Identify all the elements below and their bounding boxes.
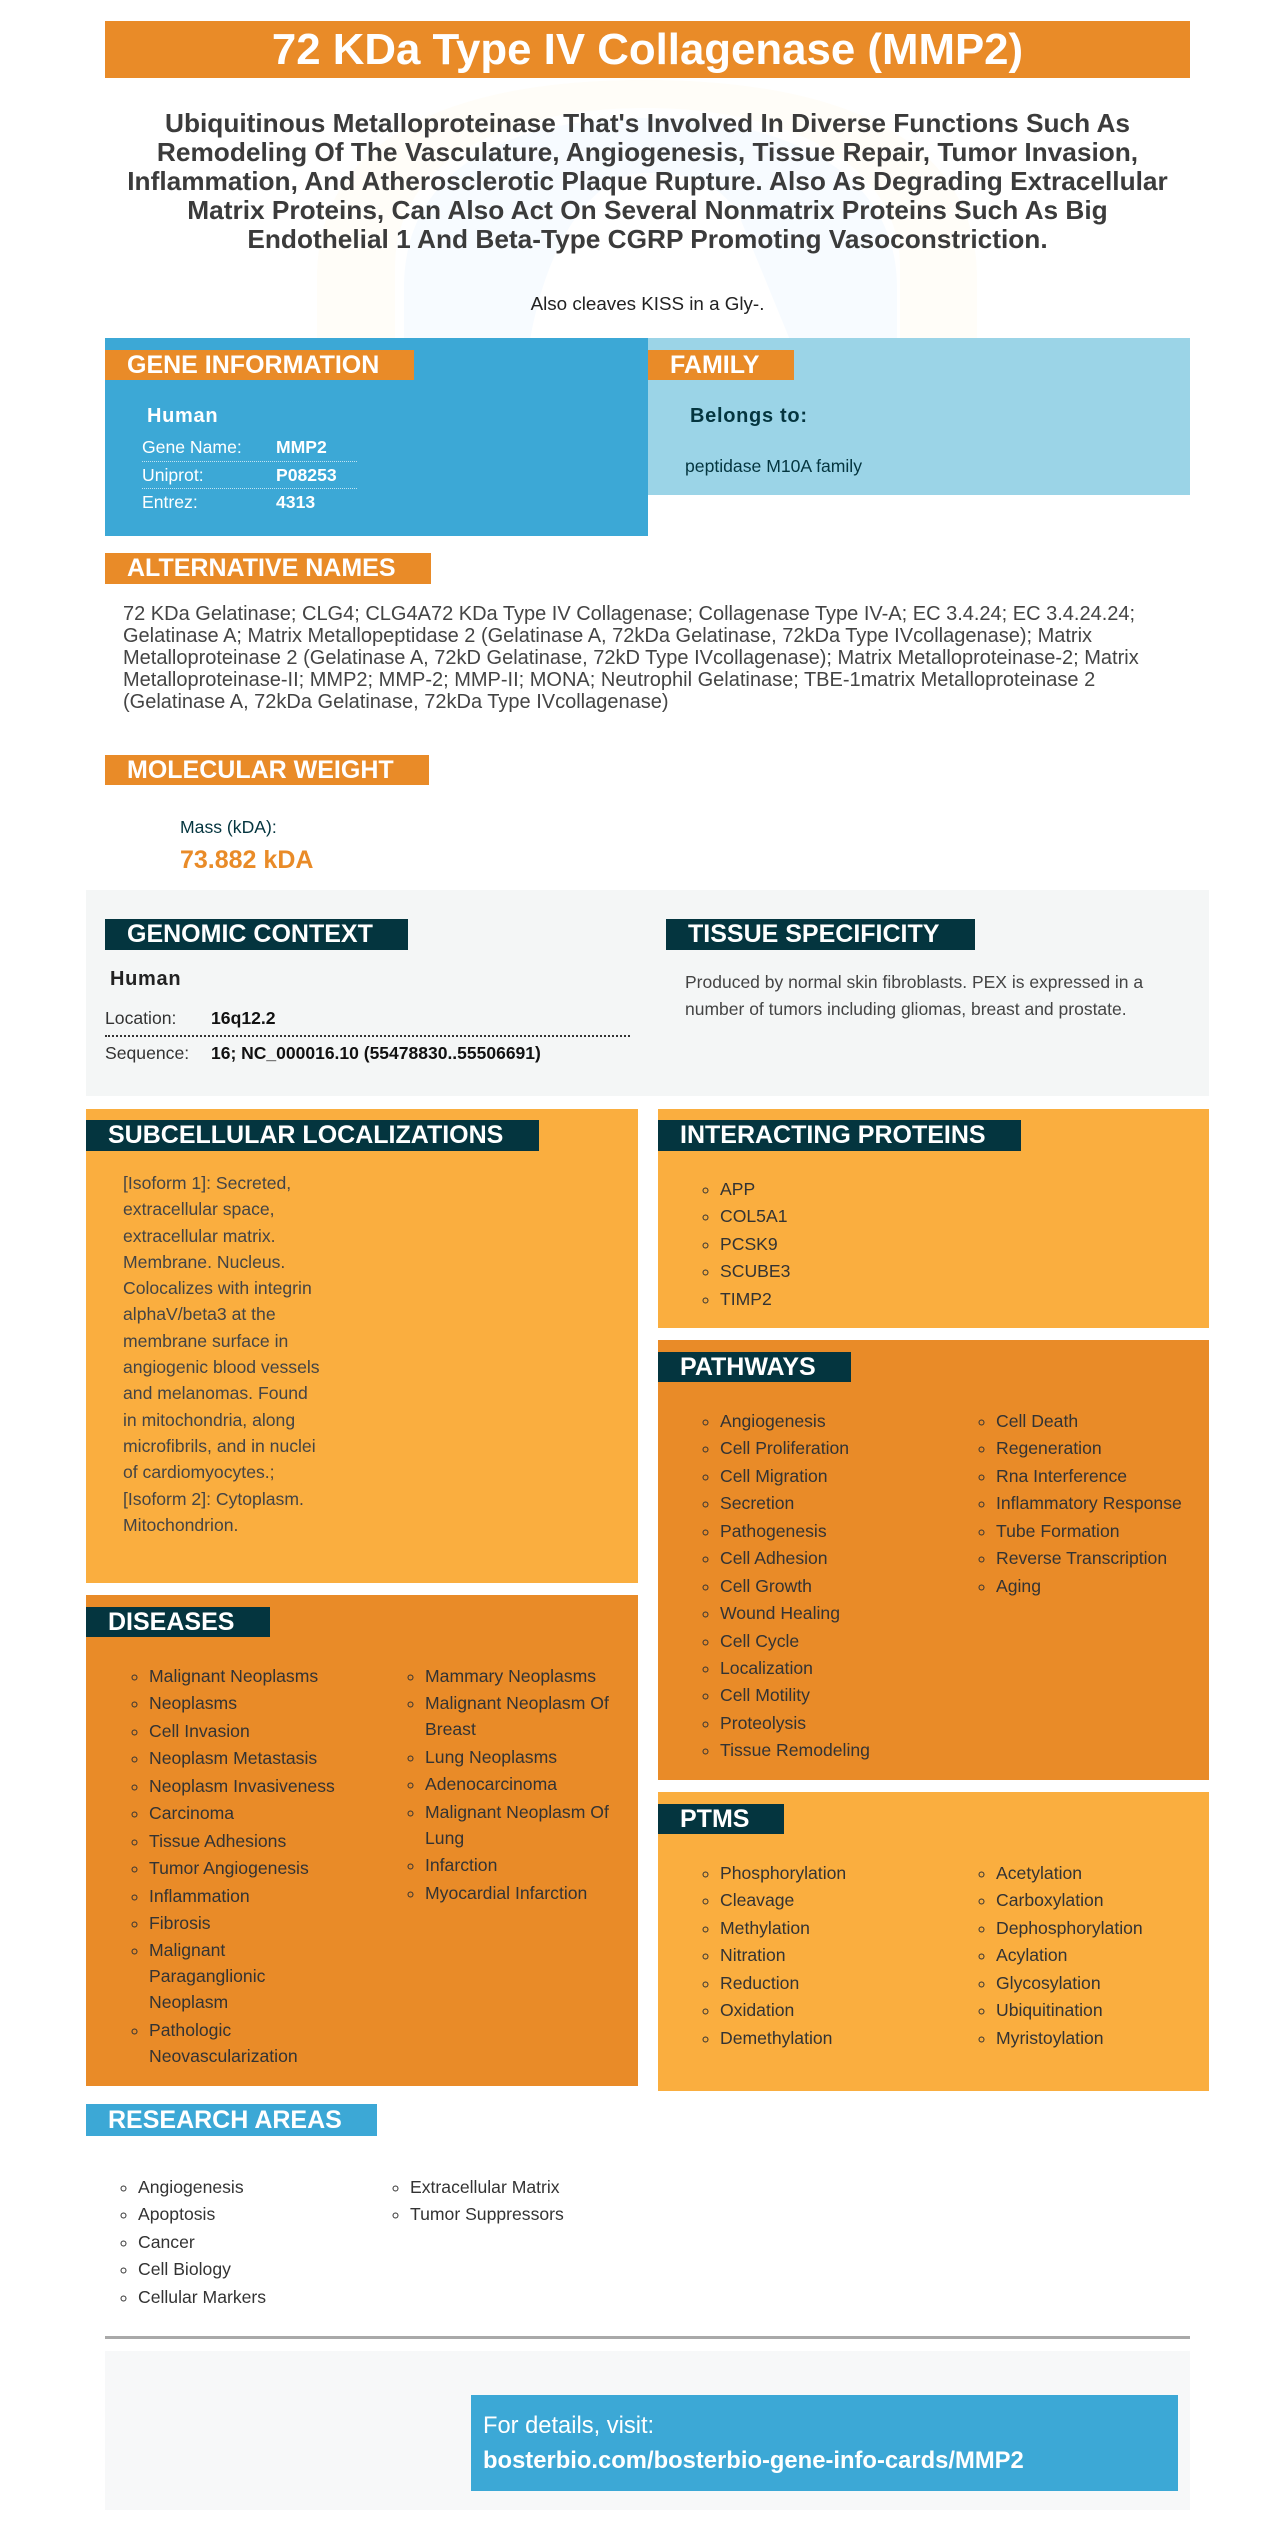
pathway list column 2: Tube Formation bbox=[996, 1521, 1120, 1541]
disease list column 1: Malignant bbox=[149, 1940, 225, 1960]
subcellular text: microfibrils, and in nuclei bbox=[123, 1436, 316, 1456]
subcellular text: extracellular space, bbox=[123, 1199, 275, 1219]
disease list column 1: Neovascularization bbox=[149, 2046, 298, 2066]
ptm list column 2: Glycosylation bbox=[996, 1973, 1101, 1993]
research list column 1: Cell Biology bbox=[138, 2259, 231, 2279]
pathway list column 1 bbox=[702, 1411, 870, 1760]
pathway list column 1: Localization bbox=[720, 1658, 813, 1678]
subcellular text: [Isoform 1]: Secreted, bbox=[123, 1173, 291, 1193]
protein list: COL5A1 bbox=[720, 1206, 787, 1226]
ptm list column 1 bbox=[702, 1863, 846, 2048]
pathway list column 2: Reverse Transcription bbox=[996, 1548, 1167, 1568]
disease list column 1: Tissue Adhesions bbox=[149, 1831, 286, 1851]
panel: footer bbox=[105, 2351, 1190, 2510]
heading: genomic context: GENOMIC CONTEXT bbox=[127, 920, 373, 948]
description bbox=[127, 108, 1168, 254]
pathway list column 1: Cell Cycle bbox=[720, 1630, 799, 1650]
pathway list column 2: Aging bbox=[996, 1576, 1041, 1596]
research list column 1: Apoptosis bbox=[138, 2204, 215, 2224]
pathway list column 1: Cell Proliferation bbox=[720, 1438, 849, 1458]
heading: gene information: GENE INFORMATION bbox=[127, 351, 379, 379]
heading: tissue specificity: TISSUE SPECIFICITY bbox=[688, 920, 939, 948]
ptm list column 2: Ubiquitination bbox=[996, 2000, 1103, 2020]
location row: 16q12.2 bbox=[211, 1008, 276, 1028]
protein list: SCUBE3 bbox=[720, 1261, 790, 1281]
belongs to: Belongs to: bbox=[690, 405, 808, 427]
pathway list column 2 bbox=[978, 1411, 1182, 1596]
heading: pathways bbox=[658, 1352, 851, 1382]
heading: interacting proteins: INTERACTING PROTEINS bbox=[680, 1121, 986, 1149]
tissue specificity text: number of tumors including gliomas, breast and prostate. bbox=[685, 998, 1127, 1018]
heading: family: FAMILY bbox=[670, 351, 759, 379]
research list column 2: Tumor Suppressors bbox=[410, 2204, 564, 2224]
uniprot row: Uniprot: bbox=[142, 465, 204, 485]
subcellular text: [Isoform 2]: Cytoplasm. bbox=[123, 1489, 304, 1509]
panel: diseases bbox=[86, 1595, 638, 2086]
disease list column 1: Inflammation bbox=[149, 1886, 250, 1906]
heading: diseases bbox=[86, 1607, 270, 1637]
pathway list column 2: Regeneration bbox=[996, 1438, 1102, 1458]
mass label: Mass (kDA): bbox=[180, 817, 277, 837]
disease list column 2: Lung Neoplasms bbox=[425, 1747, 557, 1767]
background watermark arches bbox=[300, 78, 1000, 340]
disease list column 1 bbox=[132, 1666, 335, 2066]
protein list bbox=[702, 1179, 790, 1309]
sequence row: 16; NC_000016.10 (55478830..55506691) bbox=[211, 1043, 541, 1063]
panel: genomic context and tissue specificity bbox=[86, 890, 1209, 1096]
disease list column 2: Myocardial Infarction bbox=[425, 1883, 587, 1903]
description: Inflammation, And Atherosclerotic Plaque Rupture. Also As Degrading Extracellular bbox=[127, 166, 1168, 196]
description: Endothelial 1 And Beta-Type CGRP Promoting Vasoconstriction. bbox=[247, 224, 1048, 254]
pathway list column 1: Wound Healing bbox=[720, 1603, 840, 1623]
pathway list column 1: Cell Migration bbox=[720, 1466, 828, 1486]
ptm list column 1: Nitration bbox=[720, 1945, 786, 1965]
ptm list column 1: Reduction bbox=[720, 1973, 799, 1993]
panel: gene information bbox=[105, 338, 648, 536]
pathway list column 1: Cell Growth bbox=[720, 1576, 812, 1596]
ptm list column 1: Methylation bbox=[720, 1918, 810, 1938]
pathway list column 1: Proteolysis bbox=[720, 1713, 806, 1733]
gene name row bbox=[142, 435, 357, 462]
species: Human bbox=[147, 405, 218, 427]
subcellular text: and melanomas. Found bbox=[123, 1383, 308, 1403]
subcellular text: angiogenic blood vessels bbox=[123, 1357, 320, 1377]
heading: family bbox=[648, 350, 794, 380]
pathway list column 1: Cell Adhesion bbox=[720, 1548, 828, 1568]
subcellular text: Colocalizes with integrin bbox=[123, 1278, 312, 1298]
pathway list column 2: Cell Death bbox=[996, 1411, 1078, 1431]
subcellular text bbox=[123, 1173, 320, 1535]
alternative names text: Metalloproteinase-II; MMP2; MMP-2; MMP-II; MONA; Neutrophil Gelatinase; TBE-1matrix Metalloproteinase 2 bbox=[123, 669, 1095, 691]
disease list column 2: Breast bbox=[425, 1719, 476, 1739]
protein list: APP bbox=[720, 1179, 755, 1199]
title bbox=[105, 21, 1190, 78]
ptm list column 1: Phosphorylation bbox=[720, 1863, 846, 1883]
species: Human bbox=[110, 968, 181, 990]
description: Remodeling Of The Vasculature, Angiogenesis, Tissue Repair, Tumor Invasion, bbox=[157, 136, 1138, 166]
uniprot row bbox=[142, 463, 357, 489]
ptm list column 2: Carboxylation bbox=[996, 1890, 1104, 1910]
heading: pathways: PATHWAYS bbox=[680, 1353, 816, 1381]
protein list: TIMP2 bbox=[720, 1289, 772, 1309]
sequence row: Sequence: bbox=[105, 1043, 189, 1063]
pathway list column 1: Pathogenesis bbox=[720, 1521, 827, 1541]
disease list column 2: Adenocarcinoma bbox=[425, 1774, 557, 1794]
alternative names text: 72 KDa Gelatinase; CLG4; CLG4A72 KDa Type IV Collagenase; Collagenase Type IV-A; EC 3.4.24; EC 3.4.24.24; bbox=[123, 603, 1135, 625]
ptm list column 2: Acetylation bbox=[996, 1863, 1082, 1883]
alternative names text: (Gelatinase A, 72kDa Gelatinase, 72kDa Type IVcollagenase) bbox=[123, 691, 669, 713]
location row bbox=[105, 1006, 630, 1037]
entrez row bbox=[142, 492, 315, 512]
pathway list column 2: Inflammatory Response bbox=[996, 1493, 1182, 1513]
divider bbox=[105, 2336, 1190, 2339]
research list column 2 bbox=[392, 2177, 564, 2224]
disease list column 2: Mammary Neoplasms bbox=[425, 1666, 596, 1686]
pathway list column 1: Secretion bbox=[720, 1493, 794, 1513]
research list column 2: Extracellular Matrix bbox=[410, 2177, 560, 2197]
heading: research areas: RESEARCH AREAS bbox=[108, 2106, 342, 2134]
description: Ubiquitinous Metalloproteinase That's Involved In Diverse Functions Such As bbox=[165, 108, 1130, 138]
gene name row: MMP2 bbox=[276, 437, 327, 457]
disease list column 1: Cell Invasion bbox=[149, 1721, 250, 1741]
pathway list column 2: Rna Interference bbox=[996, 1466, 1127, 1486]
heading: ptms: PTMS bbox=[680, 1805, 749, 1833]
disease list column 2: Malignant Neoplasm Of bbox=[425, 1802, 609, 1822]
heading: diseases: DISEASES bbox=[108, 1608, 234, 1636]
research list column 1: Angiogenesis bbox=[138, 2177, 244, 2197]
disease list column 2 bbox=[408, 1666, 609, 1903]
ptm list column 2: Acylation bbox=[996, 1945, 1067, 1965]
protein list: PCSK9 bbox=[720, 1234, 778, 1254]
note: Also cleaves KISS in a Gly-. bbox=[531, 293, 764, 314]
ptm list column 1: Oxidation bbox=[720, 2000, 794, 2020]
disease list column 1: Paraganglionic bbox=[149, 1966, 265, 1986]
subcellular text: Mitochondrion. bbox=[123, 1515, 238, 1535]
heading: molecular weight: MOLECULAR WEIGHT bbox=[127, 756, 394, 784]
subcellular text: in mitochondria, along bbox=[123, 1410, 295, 1430]
pathway list column 1: Cell Motility bbox=[720, 1685, 810, 1705]
alternative names text: Gelatinase A; Matrix Metallopeptidase 2 (Gelatinase A, 72kDa Gelatinase, 72kDa Type IVcollagenase); Matrix bbox=[123, 625, 1092, 647]
disease list column 1: Neoplasms bbox=[149, 1693, 237, 1713]
disease list column 2: Malignant Neoplasm Of bbox=[425, 1693, 609, 1713]
disease list column 1: Carcinoma bbox=[149, 1803, 234, 1823]
title: 72 KDa Type IV Collagenase (MMP2) bbox=[272, 25, 1023, 74]
mass value: 73.882 kDA bbox=[180, 846, 313, 874]
disease list column 1: Neoplasm bbox=[149, 1992, 228, 2012]
disease list column 1: Neoplasm Invasiveness bbox=[149, 1776, 335, 1796]
ptm list column 1: Demethylation bbox=[720, 2028, 832, 2048]
tissue specificity text: Produced by normal skin fibroblasts. PEX is expressed in a bbox=[685, 972, 1143, 992]
alternative names text bbox=[123, 603, 1139, 713]
alternative names text: Metalloproteinase 2 (Gelatinase A, 72kD Gelatinase, 72kD Type IVcollagenase); Matrix Metalloproteinase-2; Matrix bbox=[123, 647, 1139, 669]
entrez row: 4313 bbox=[276, 492, 315, 512]
disease list column 1: Malignant Neoplasms bbox=[149, 1666, 318, 1686]
disease list column 1: Tumor Angiogenesis bbox=[149, 1858, 309, 1878]
disease list column 1: Neoplasm Metastasis bbox=[149, 1748, 317, 1768]
disease list column 2: Lung bbox=[425, 1828, 464, 1848]
subcellular text: of cardiomyocytes.; bbox=[123, 1462, 275, 1482]
entrez row: Entrez: bbox=[142, 492, 198, 512]
heading: alternative names: ALTERNATIVE NAMES bbox=[127, 554, 396, 582]
gene name row: Gene Name: bbox=[142, 437, 242, 457]
ptm list column 1: Cleavage bbox=[720, 1890, 794, 1910]
callout url: bosterbio.com/bosterbio-gene-info-cards/MMP2 bbox=[483, 2447, 1024, 2474]
research list column 1 bbox=[120, 2177, 266, 2307]
callout: details link bbox=[471, 2395, 1178, 2491]
disease list column 1: Pathologic bbox=[149, 2020, 231, 2040]
uniprot row: P08253 bbox=[276, 465, 337, 485]
location row: Location: bbox=[105, 1008, 176, 1028]
tissue specificity text bbox=[685, 972, 1144, 1018]
pathway list column 1: Tissue Remodeling bbox=[720, 1740, 870, 1760]
subcellular text: alphaV/beta3 at the bbox=[123, 1304, 276, 1324]
heading: ptms bbox=[658, 1804, 784, 1834]
subcellular text: Membrane. Nucleus. bbox=[123, 1252, 285, 1272]
ptm list column 2: Dephosphorylation bbox=[996, 1918, 1143, 1938]
research list column 1: Cellular Markers bbox=[138, 2287, 266, 2307]
panel: interacting proteins bbox=[658, 1109, 1209, 1328]
research list column 1: Cancer bbox=[138, 2232, 195, 2252]
ptm list column 2: Myristoylation bbox=[996, 2028, 1104, 2048]
pathway list column 1: Angiogenesis bbox=[720, 1411, 826, 1431]
panel: family bbox=[648, 338, 1190, 495]
disease list column 1: Fibrosis bbox=[149, 1913, 211, 1933]
panel: ptms bbox=[658, 1792, 1209, 2091]
heading: subcellular localizations: SUBCELLULAR LOCALIZATIONS bbox=[108, 1121, 503, 1149]
subcellular text: extracellular matrix. bbox=[123, 1226, 276, 1246]
panel: pathways bbox=[658, 1340, 1209, 1780]
family name: peptidase M10A family bbox=[685, 456, 862, 476]
panel: subcellular localizations bbox=[86, 1109, 638, 1583]
subcellular text: membrane surface in bbox=[123, 1331, 288, 1351]
description: Matrix Proteins, Can Also Act On Several Nonmatrix Proteins Such As Big bbox=[187, 194, 1108, 224]
disease list column 2: Infarction bbox=[425, 1855, 497, 1875]
ptm list column 2 bbox=[978, 1863, 1143, 2048]
callout label: For details, visit: bbox=[483, 2413, 654, 2439]
